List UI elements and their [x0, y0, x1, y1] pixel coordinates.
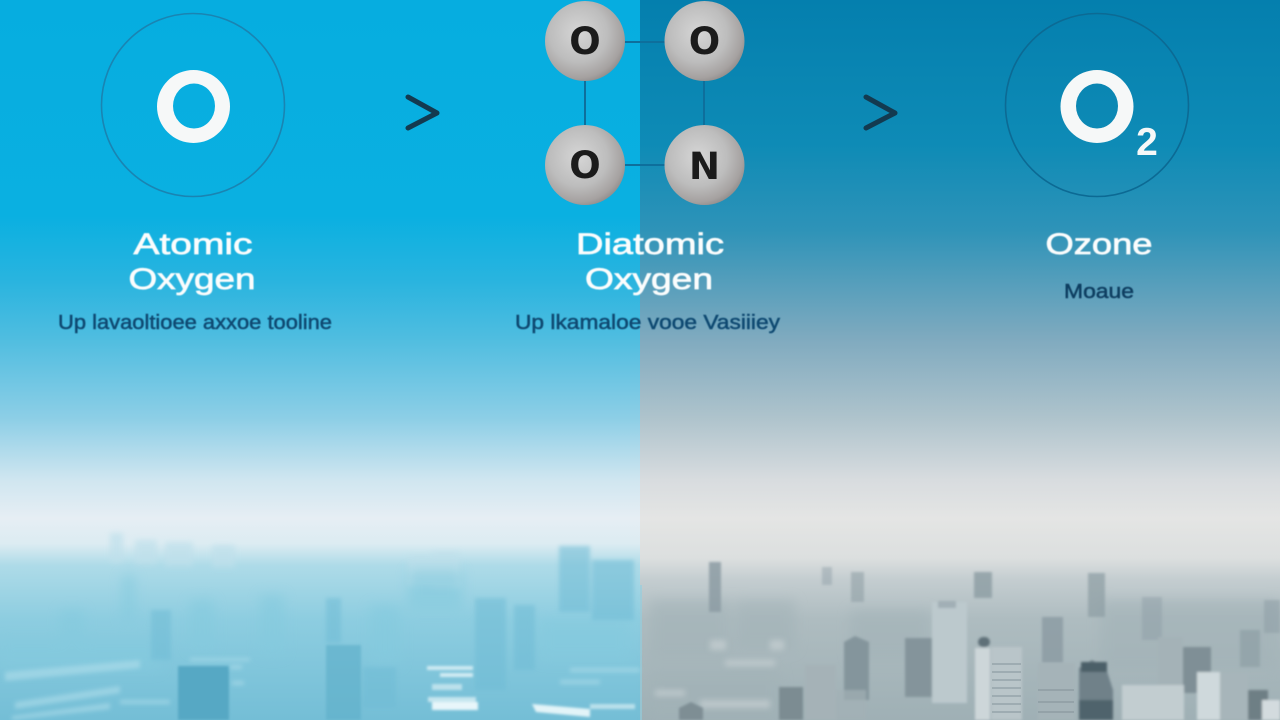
- atom: N bottom right: N: [689, 145, 720, 188]
- heading: Ozone: Ozone: [1046, 228, 1152, 261]
- atom: O top right: [664, 1, 744, 81]
- atom: O top left: O: [569, 20, 601, 63]
- heading: Diatomic Oxygen: Oxygen: [585, 263, 713, 296]
- panel: left blue sky background: [0, 0, 640, 720]
- heading: Atomic Oxygen: Atomic: [134, 228, 252, 261]
- arrow: diatomic to ozone: [866, 97, 895, 128]
- heading: Diatomic Oxygen: Diatomic: [576, 228, 724, 261]
- circle: ozone ring: [1006, 14, 1188, 196]
- arrow: atomic to diatomic: [408, 97, 437, 128]
- caption: ozone description: Moaue: [1064, 281, 1134, 303]
- atom: O bottom left: O: [569, 144, 601, 187]
- atom: O bottom left: [545, 125, 625, 205]
- heading: Atomic Oxygen: Oxygen: [128, 263, 256, 296]
- caption: atomic oxygen description: Up lavaoltioee axxoe tooline: [58, 312, 332, 334]
- atom: N bottom right: [664, 125, 744, 205]
- seam glow: [640, 585, 642, 720]
- panel: right hazy sky background: [640, 0, 1280, 720]
- circle: atomic oxygen ring: [102, 14, 284, 196]
- illustration: hazy grey city skyline: [640, 562, 1280, 720]
- caption: diatomic oxygen description: Up lkamaloe vooe Vasiiiey: [515, 312, 780, 334]
- diagram: molecule with four atoms: [545, 1, 744, 205]
- icon: ozone formula O2: [1060, 70, 1158, 164]
- distant towers: [709, 562, 1280, 667]
- atom: O top left: [545, 1, 625, 81]
- icon: atomic oxygen letter O: [157, 70, 230, 143]
- heading: Diatomic Oxygen: [576, 228, 724, 296]
- icon: ozone formula O2: 2: [1136, 121, 1158, 164]
- atom: O top right: O: [689, 20, 720, 63]
- heading: Atomic Oxygen: [128, 228, 256, 296]
- illustration: clean blue city skyline: [0, 533, 640, 720]
